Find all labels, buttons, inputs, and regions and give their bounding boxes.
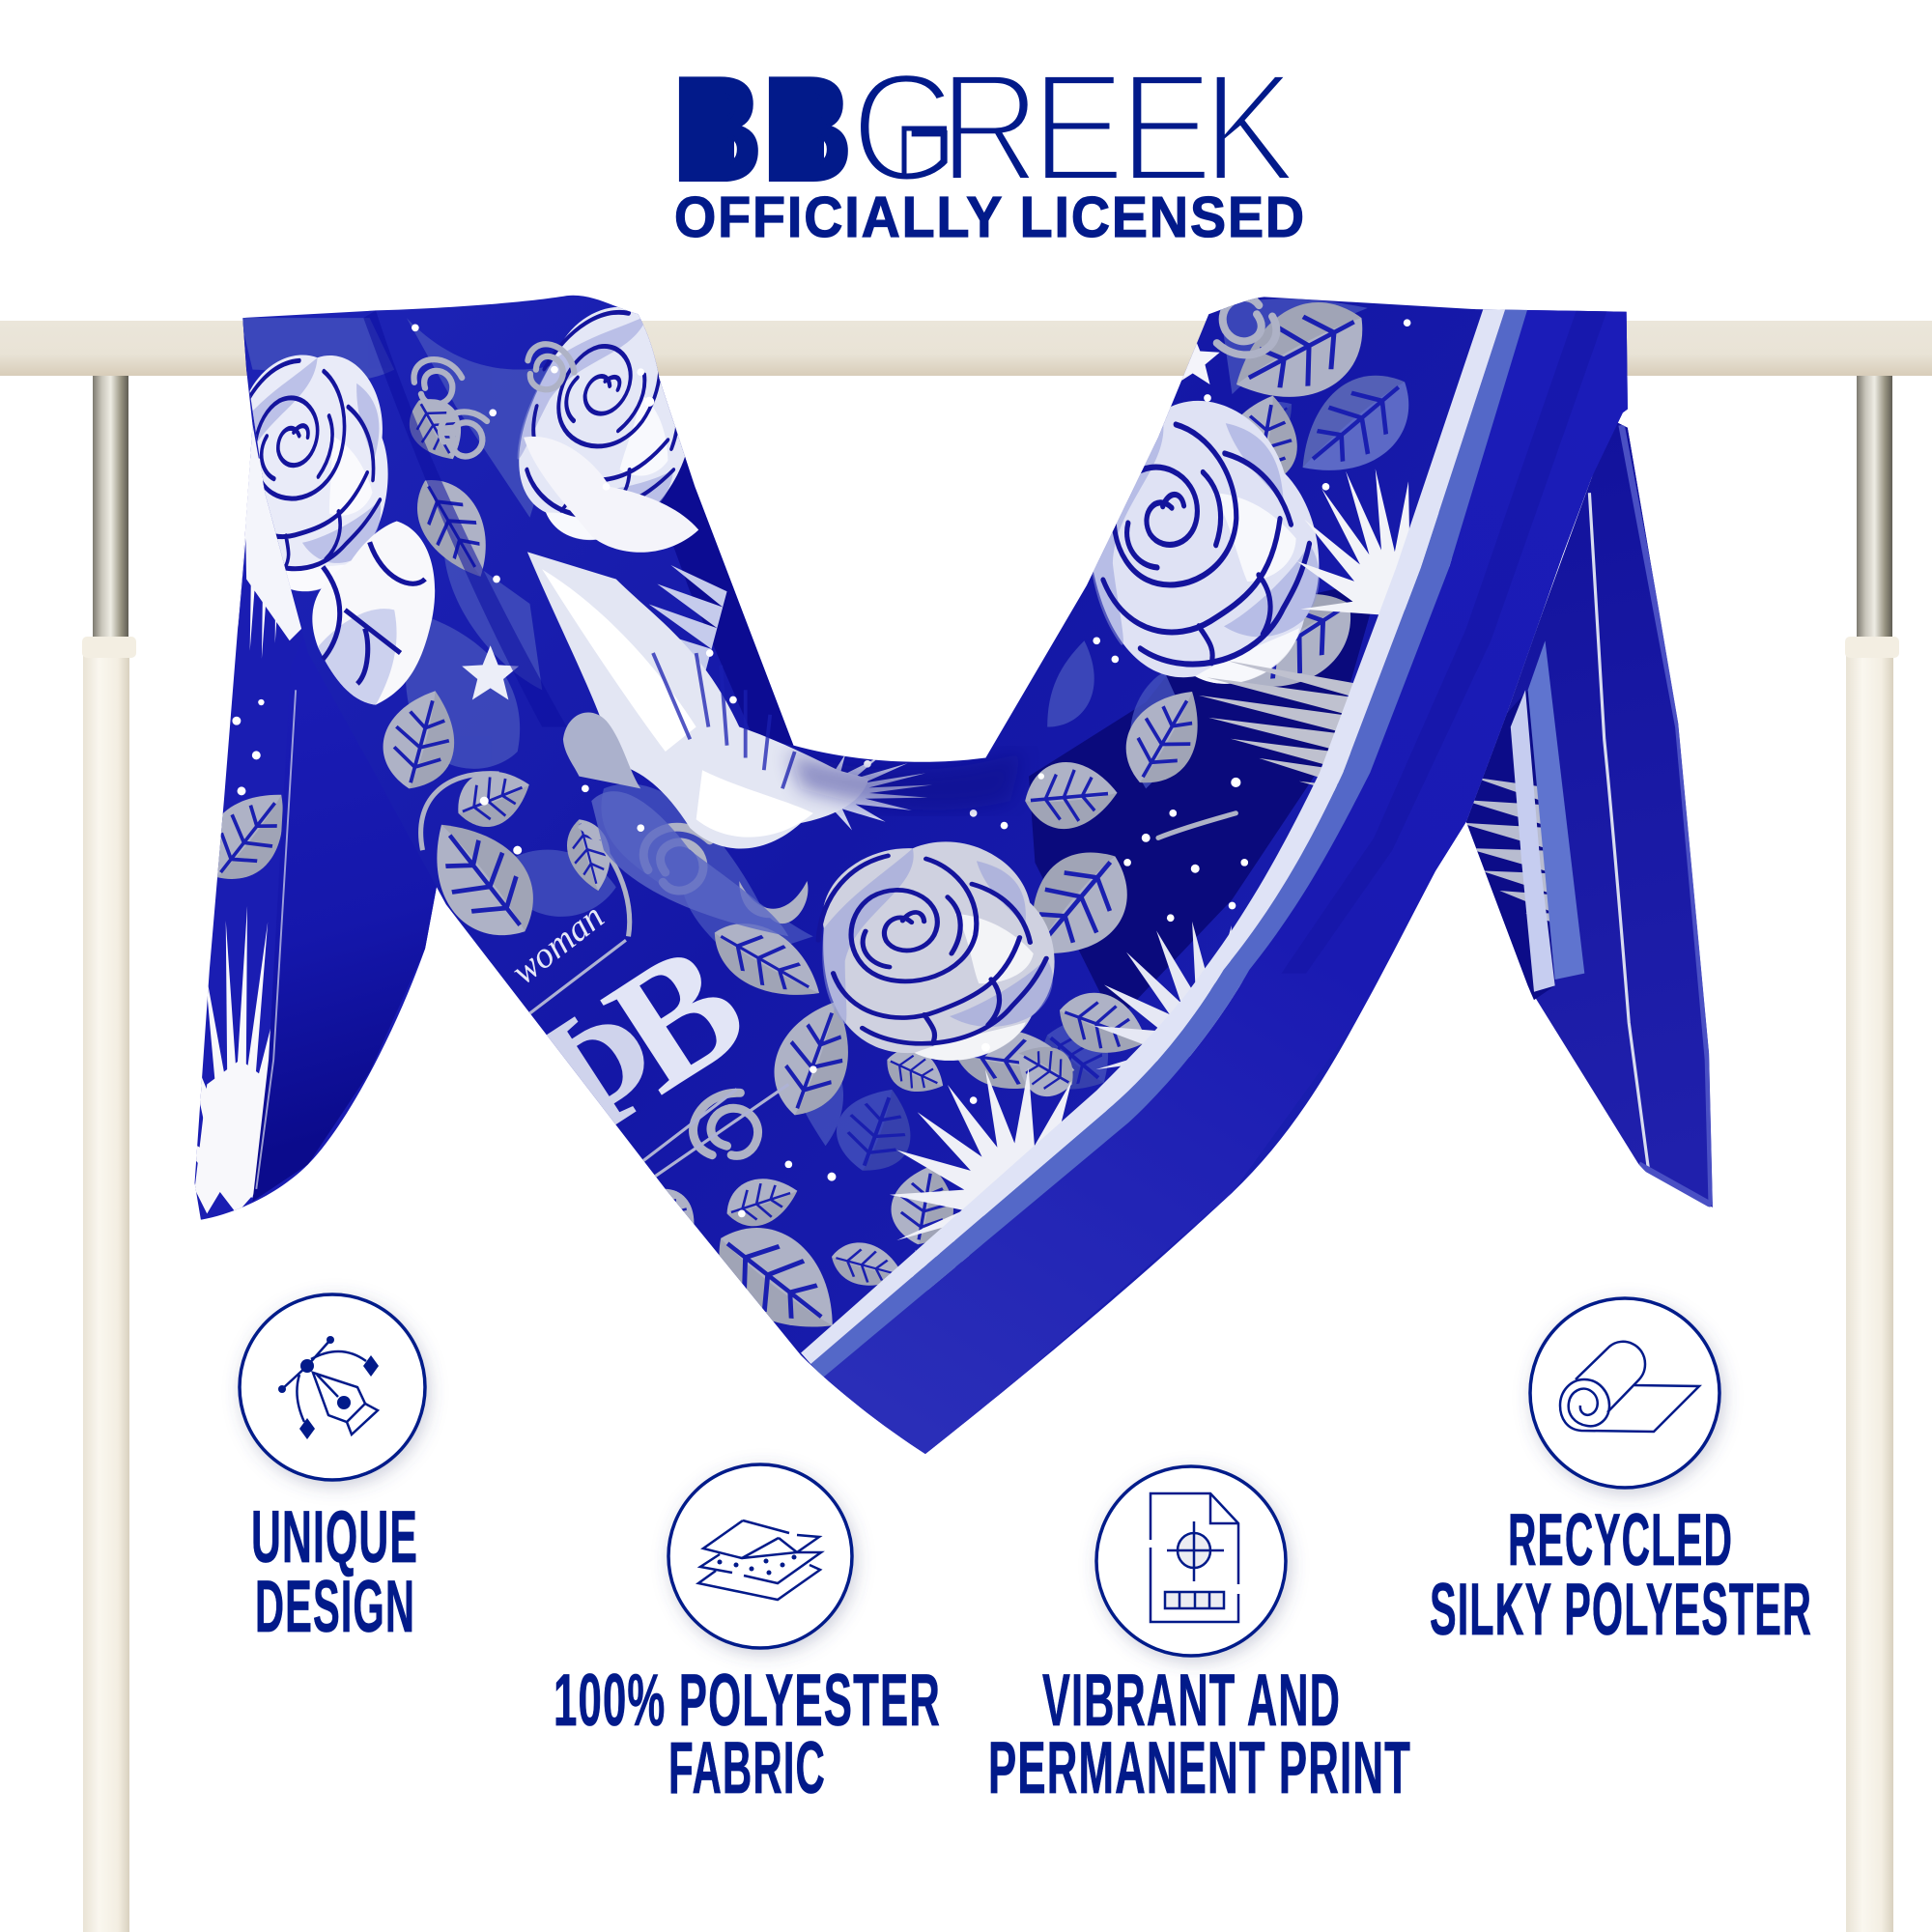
frond: upper right white (1262, 440, 1483, 646)
tail: white feather base (195, 1062, 264, 1213)
label: vibrant print (988, 1660, 1411, 1809)
monogram: letter phi: Φ (470, 957, 695, 1196)
dove: head shading (563, 713, 640, 788)
feature: recycled silky polyester (1430, 1298, 1812, 1651)
body: center rose (815, 841, 1055, 1061)
rack: left metal post (93, 373, 128, 639)
body: crescent (739, 881, 808, 923)
body: monogram panel (470, 896, 788, 1196)
icon: print document (1096, 1466, 1286, 1656)
body: dash ornament (1158, 813, 1236, 838)
rack: left collar (82, 637, 136, 658)
body: swirls (407, 298, 1276, 1174)
dove: second muted bird (591, 791, 788, 936)
body: dark field (1029, 579, 1380, 1023)
body: fold shadow (363, 310, 567, 727)
label: unique design: UNIQUE (251, 1496, 418, 1578)
petal: large white (312, 522, 435, 705)
dove: feather slits (653, 653, 795, 788)
dove: body (527, 552, 868, 849)
rack: horizontal rail (0, 321, 1932, 376)
monogram: script word: woman (504, 896, 611, 993)
label: polyester fabric: 100% POLYESTER (554, 1660, 941, 1742)
body: dark fold strip (659, 383, 794, 746)
label: vibrant print: PERMANENT PRINT (988, 1727, 1411, 1809)
scarf: main body (209, 281, 1638, 1466)
body: fronds (841, 440, 1483, 1326)
feature: polyester fabric (554, 1464, 941, 1809)
body: upper-left rose (249, 355, 388, 591)
body: top-right star (1181, 343, 1220, 384)
rack: right lower tube (1846, 641, 1893, 1932)
dove: tail feathers (835, 755, 931, 831)
frond: dark zone (1190, 658, 1359, 794)
rack: right collar (1845, 637, 1899, 658)
body: soft shadow at V (788, 752, 1023, 810)
logo G inner stroke (904, 128, 947, 175)
scarf (171, 281, 1713, 1466)
leaf: blue lavender (1302, 375, 1408, 470)
body: white lower petals of left rose (312, 522, 435, 705)
band: darker sheen (1282, 308, 1608, 974)
tail: white wing upper (238, 458, 278, 659)
body: leaves (373, 281, 1432, 1356)
band: outer blue (823, 301, 1638, 1460)
label: unique design: DESIGN (255, 1566, 415, 1648)
body: white dots (412, 319, 1410, 1217)
monogram: rules (523, 940, 788, 1182)
icon: fabric layers (668, 1464, 852, 1648)
tail: leaf (217, 794, 283, 879)
scarf: right hanging tail (1459, 420, 1713, 1208)
body: star (462, 645, 519, 699)
logo tagline: OFFICIALLY LICENSED (674, 185, 1306, 249)
frond: bottom lavender (893, 1216, 1030, 1326)
feature: vibrant print (988, 1466, 1411, 1809)
label: recycled silky polyester: RECYCLED (1508, 1499, 1733, 1581)
body: upper-center rose (518, 307, 685, 541)
band: periwinkle stripe (810, 308, 1528, 1378)
dove: upper wing feathers (649, 565, 726, 670)
icon: pen tool (240, 1294, 425, 1480)
dove: white highlight (542, 569, 813, 838)
rack: right metal post (1857, 373, 1892, 639)
label: polyester fabric: FABRIC (668, 1727, 826, 1809)
frond: lower white (841, 1018, 1129, 1271)
tail: white strip (245, 422, 301, 641)
body: dove (527, 552, 936, 936)
frond: right of center rose (1054, 883, 1317, 1101)
leaf group: grey leaves (373, 281, 1383, 1356)
logo wordmark GREEK: GREEK (851, 43, 1296, 214)
logo (672, 43, 1306, 249)
tail: dots (232, 699, 265, 795)
label: unique design (251, 1496, 418, 1648)
label: recycled silky polyester (1430, 1499, 1812, 1651)
body: border band (801, 301, 1638, 1460)
scarf: left hanging tail (195, 319, 437, 1220)
petal: blue lines (323, 542, 425, 684)
tail: dark inner flap (253, 806, 437, 1202)
logo mark BB: BB (672, 47, 852, 212)
band: white stripe (801, 308, 1506, 1364)
petal: lavender (318, 609, 397, 705)
monogram: letter B: B (576, 905, 777, 1128)
body: white lower petals (524, 437, 698, 553)
icon: fabric roll (1530, 1298, 1719, 1488)
feature: unique design (240, 1294, 425, 1648)
rack: left lower tube (83, 641, 129, 1932)
label: polyester fabric (554, 1660, 941, 1809)
body: right rose (1092, 400, 1320, 684)
label: vibrant print: VIBRANT AND (1042, 1660, 1341, 1742)
body: stem (421, 774, 630, 936)
tail: white feathers lower (196, 906, 270, 1210)
body: muted background leaves (241, 298, 1368, 1182)
